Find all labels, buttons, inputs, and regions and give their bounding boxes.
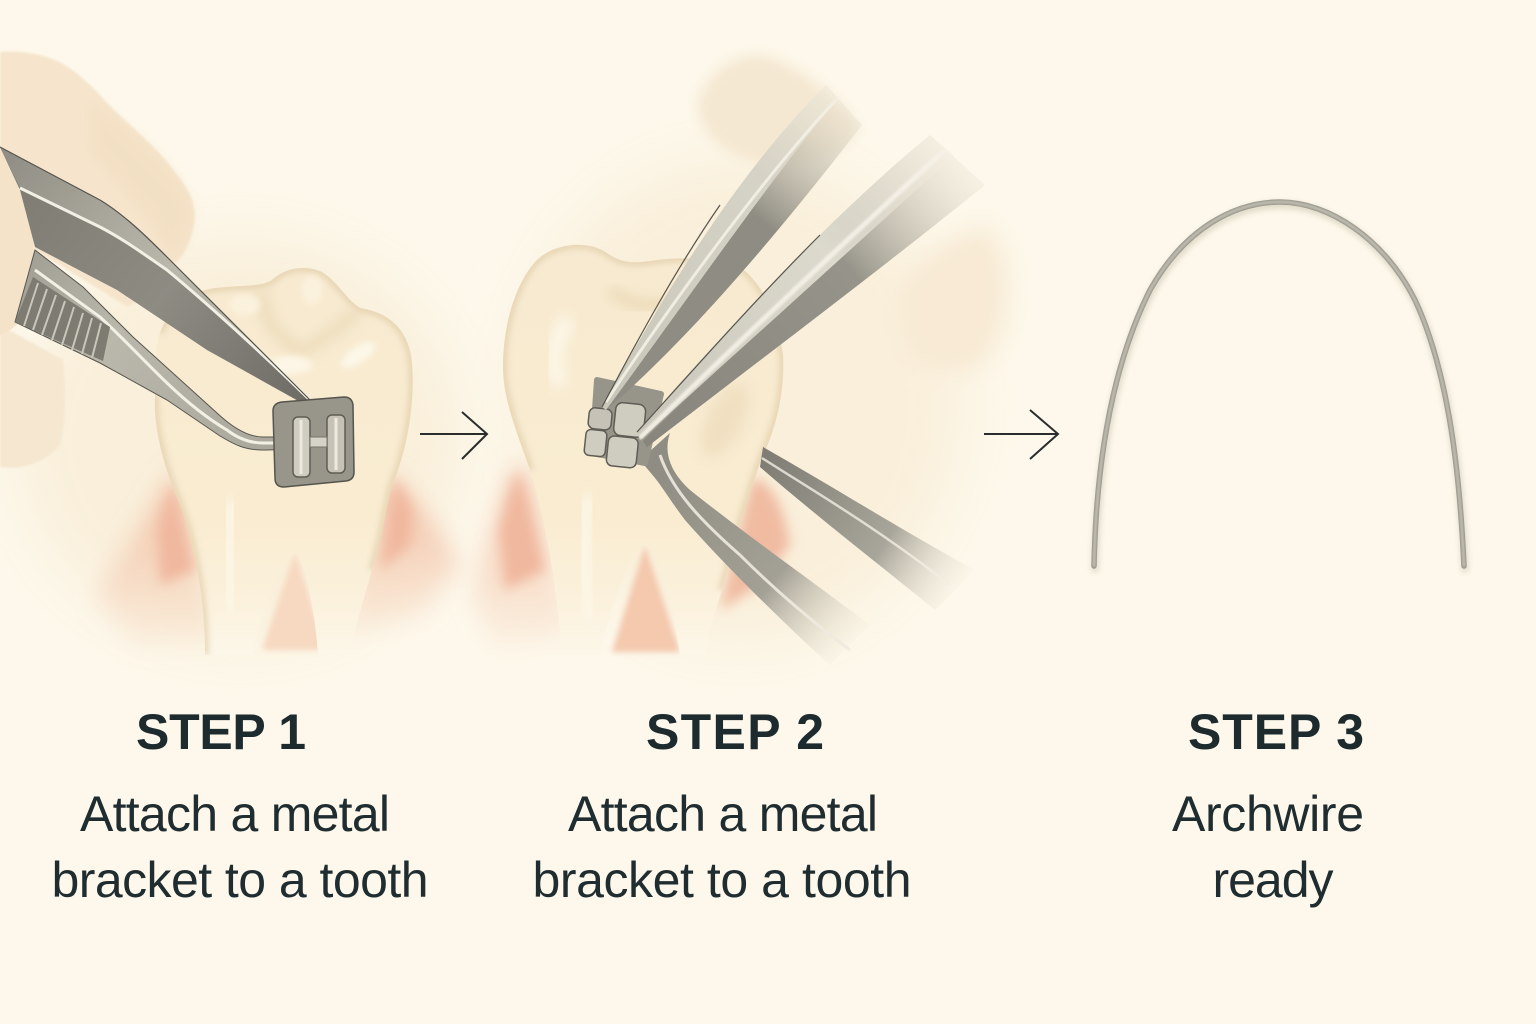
bracket (583, 380, 661, 469)
soft halo behind tooth (20, 240, 460, 640)
bracket (273, 397, 354, 487)
description: step 3: ready (1212, 852, 1334, 908)
arrow: step 2 to step 3 (984, 410, 1058, 459)
soft halo behind tooth (520, 160, 960, 640)
tooth body (503, 245, 783, 655)
step 2 label (532, 704, 912, 908)
tooth shading (155, 268, 413, 655)
finger: lower left (0, 325, 65, 468)
illustration: archwire (1094, 202, 1465, 569)
description: step 3: Archwire (1172, 786, 1364, 842)
description: step 1: Attach a metal (80, 786, 390, 842)
description: step 2: bracket to a tooth (532, 852, 912, 908)
tweezer: lower arm (15, 250, 330, 450)
description: step 1: bracket to a tooth (52, 852, 428, 908)
gums (95, 470, 460, 650)
finger: upper (0, 52, 195, 307)
finger: left thumb (0, 147, 35, 335)
heading: step 3: STEP 3 (1188, 704, 1364, 760)
heading: step 2: STEP 2 (646, 704, 824, 760)
tweezer: right lower arm (760, 447, 975, 610)
description: step 2: Attach a metal (568, 786, 878, 842)
serrated grip (15, 277, 110, 361)
tweezer: upper arm (0, 147, 327, 417)
arrow: step 1 to step 2 (420, 412, 487, 459)
finger: right (898, 225, 1008, 373)
tweezer: upper right arm (637, 135, 985, 447)
step 1 label (52, 704, 428, 908)
heading: step 1: STEP 1 (136, 704, 306, 760)
gums (472, 462, 790, 652)
tooth body (155, 268, 413, 655)
step 3 label (1172, 704, 1364, 908)
tooth shading (503, 245, 783, 620)
tweezer: upper left arm (602, 85, 862, 410)
finger: top (698, 55, 858, 165)
illustration: step 1 tooth with tweezers (0, 52, 460, 655)
illustration: step 2 tooth with two tweezers (472, 55, 1008, 665)
tweezer: lower arm (640, 433, 870, 665)
